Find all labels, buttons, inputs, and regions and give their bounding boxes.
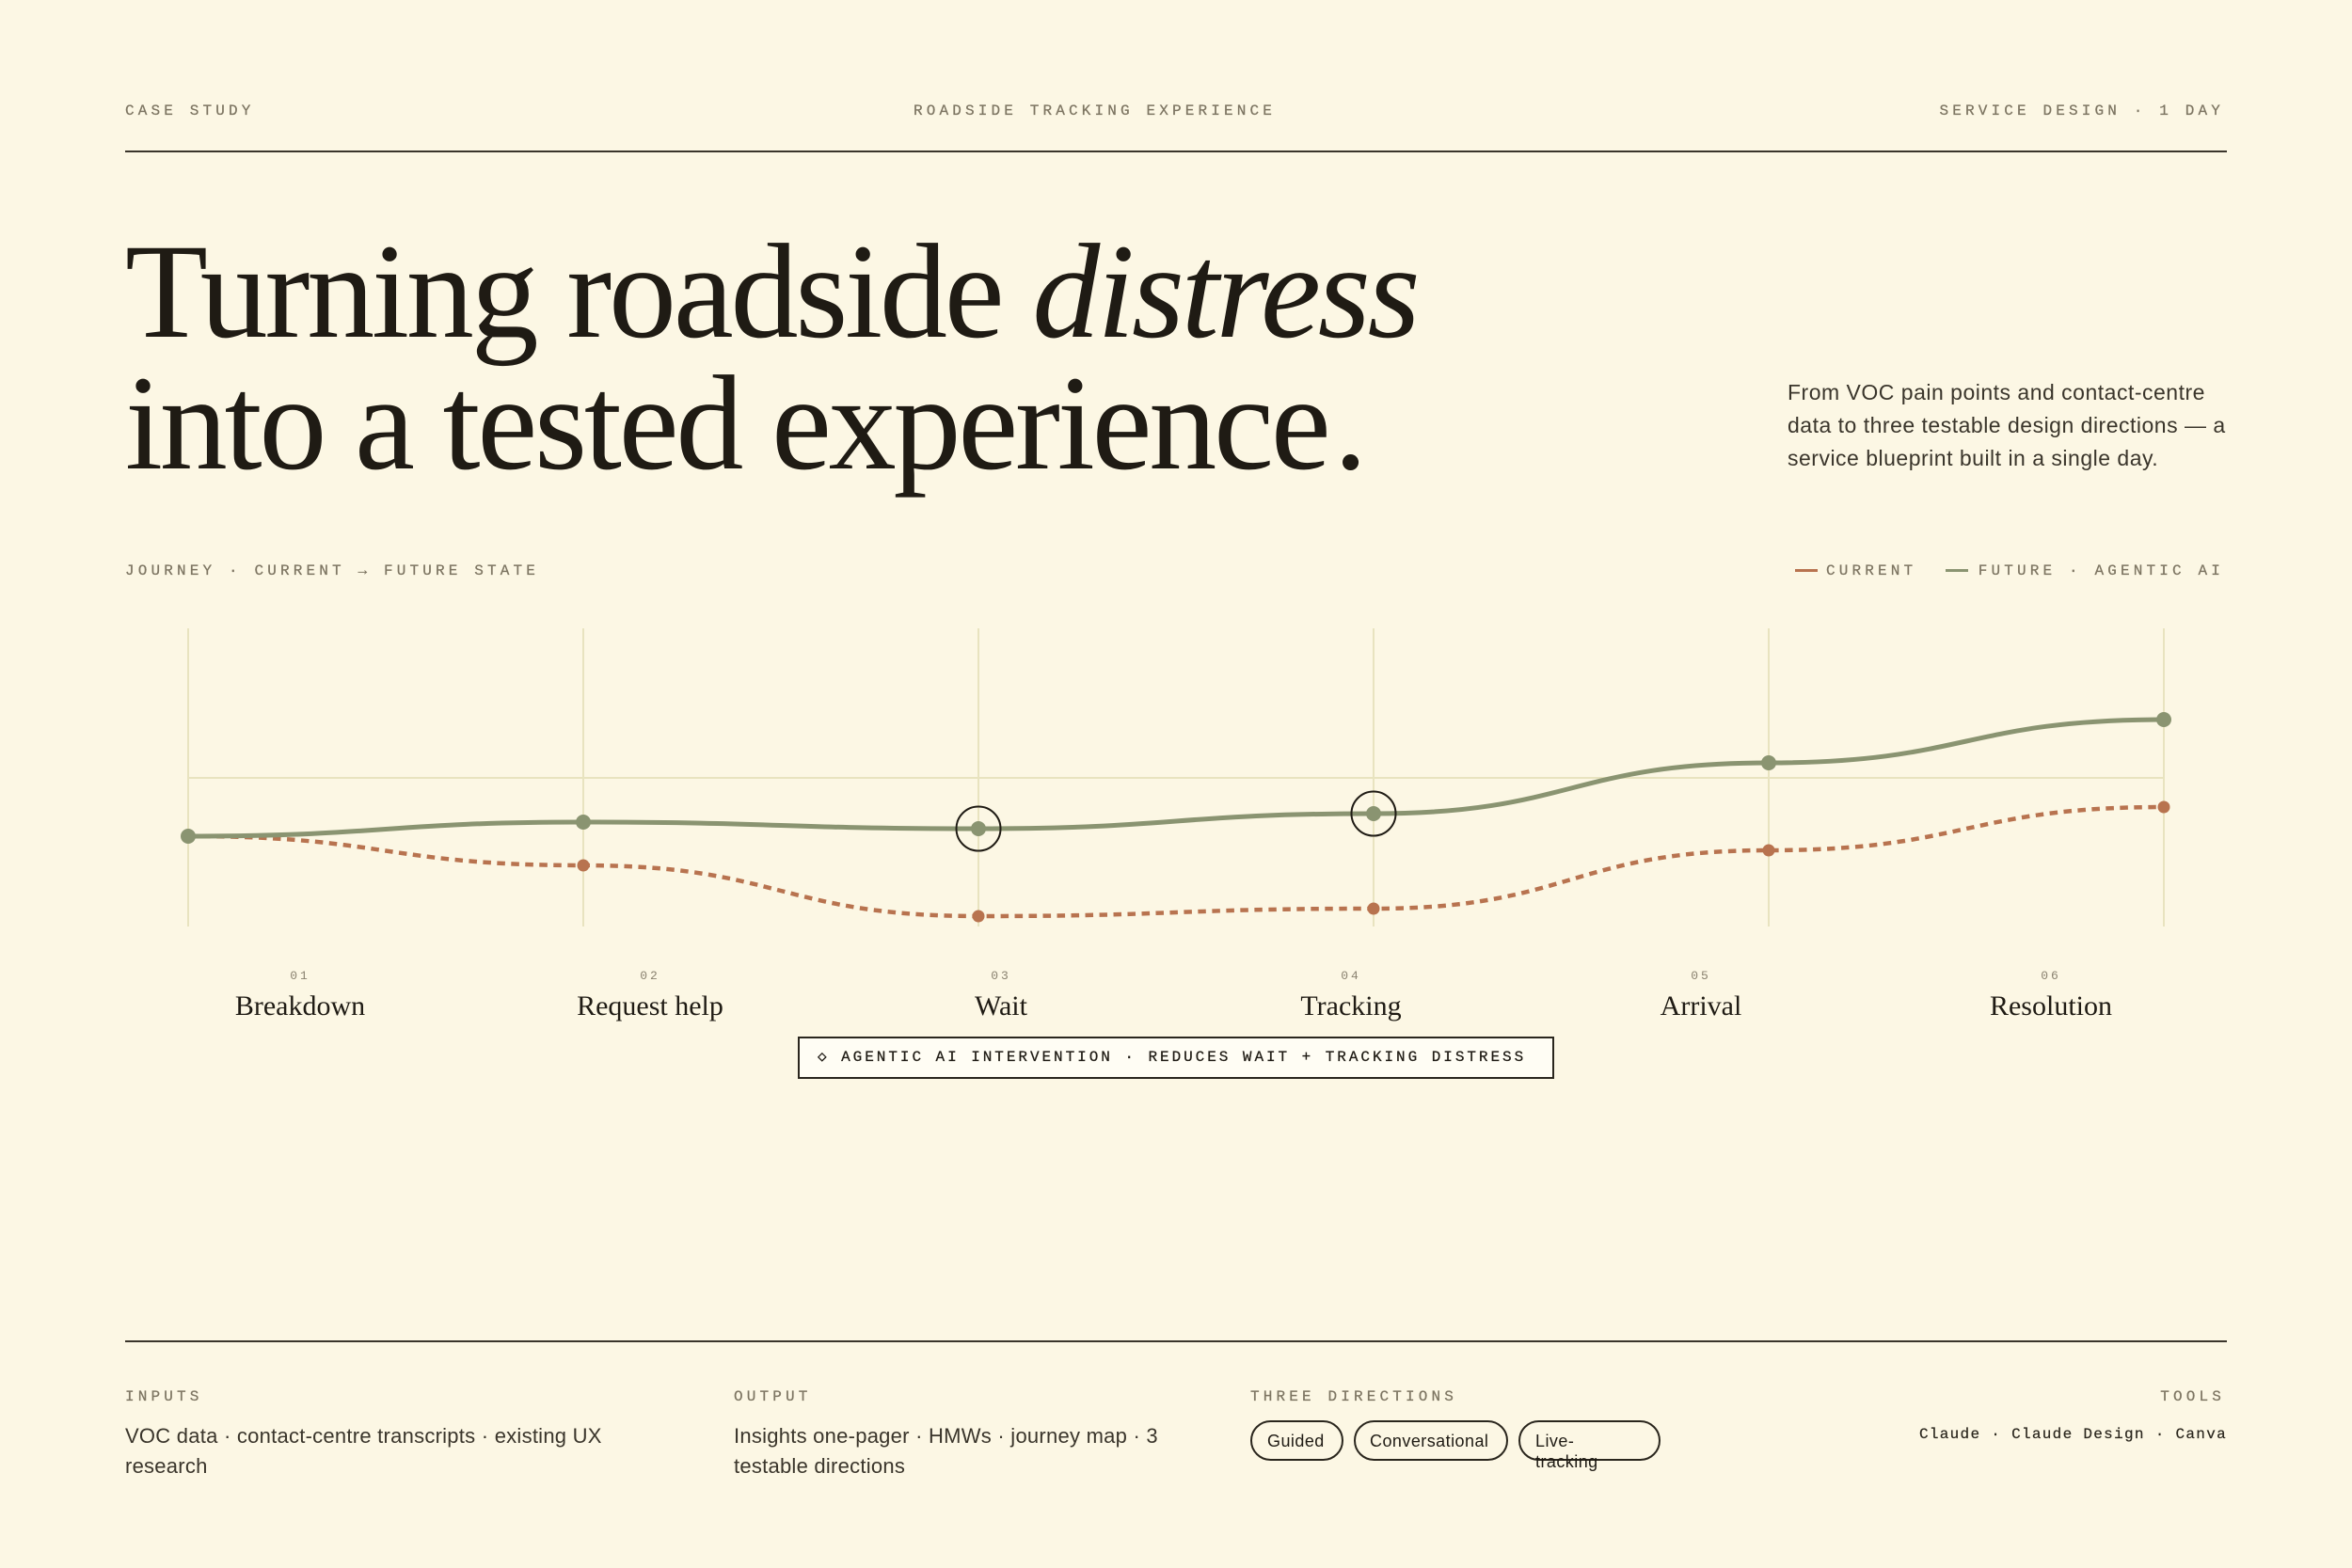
tools list: Claude · Claude Design · Canva (1919, 1426, 2227, 1443)
pill: guided (1250, 1420, 1343, 1461)
stage name: tracking: Tracking (1300, 990, 1402, 1022)
current state dashed line (188, 801, 2169, 922)
header bar (125, 103, 2224, 119)
pill: live-tracking (1518, 1420, 1661, 1461)
main heading: into a tested experience. (125, 349, 1364, 499)
intro paragraph (1788, 380, 2226, 470)
callout: agentic AI intervention: ◇ AGENTIC AI INTERVENTION · REDUCES WAIT + TRACKING DISTRESS (818, 1049, 1526, 1066)
journey line chart (181, 628, 2171, 927)
tools label: TOOLS (2160, 1388, 2225, 1405)
inputs text: research (125, 1454, 208, 1478)
pill: live-tracking: Live- (1535, 1432, 1574, 1450)
stage number 02: 02 (640, 969, 660, 983)
stage number 01: 01 (290, 969, 310, 983)
stage name: request help: Request help (577, 990, 723, 1022)
stage labels (235, 969, 2112, 1022)
callout: agentic AI intervention (798, 1037, 1554, 1079)
output text: Insights one-pager · HMWs · journey map · 3 (734, 1424, 1158, 1448)
stage name: wait: Wait (975, 990, 1027, 1022)
footer: tools (1919, 1388, 2227, 1443)
legend label: future: FUTURE · AGENTIC AI (1979, 562, 2224, 579)
main heading (125, 217, 1417, 499)
future state solid line (181, 712, 2171, 844)
inputs text (125, 1424, 602, 1478)
stage name: arrival: Arrival (1661, 990, 1741, 1022)
chart legend (1795, 562, 2224, 579)
text: tracking (1535, 1452, 1598, 1471)
footer: inputs (125, 1388, 602, 1478)
stage number 06: 06 (2041, 969, 2061, 983)
pill: conversational (1354, 1420, 1508, 1461)
header label: project title: ROADSIDE TRACKING EXPERIENCE (914, 103, 1276, 119)
inputs text: VOC data · contact-centre transcripts · existing UX (125, 1424, 602, 1448)
intro paragraph: From VOC pain points and contact-centre (1788, 380, 2205, 404)
output text (734, 1424, 1158, 1478)
intro paragraph: service blueprint built in a single day. (1788, 446, 2158, 470)
output text: testable directions (734, 1454, 905, 1478)
intervention marker: tracking (1351, 792, 1396, 835)
three directions label: THREE DIRECTIONS (1250, 1388, 1457, 1405)
stage number 05: 05 (1691, 969, 1711, 983)
chart section heading: JOURNEY · CURRENT → FUTURE STATE (125, 562, 539, 579)
header label: discipline and duration: SERVICE DESIGN · 1 DAY (1939, 103, 2224, 119)
header label: case study: CASE STUDY (125, 103, 255, 119)
intervention marker: wait (956, 807, 1001, 850)
intro paragraph: data to three testable design directions — a (1788, 413, 2226, 437)
footer: output (734, 1388, 1158, 1478)
pill: conversational: Conversational (1370, 1432, 1488, 1450)
stage number 03: 03 (991, 969, 1011, 983)
stage name: resolution: Resolution (1990, 990, 2112, 1022)
legend swatch: future (1946, 569, 1968, 572)
main heading: Turning roadside distress (125, 217, 1417, 367)
stage number 04: 04 (1341, 969, 1361, 983)
inputs label: INPUTS (125, 1388, 203, 1405)
pill: guided: Guided (1267, 1432, 1325, 1450)
legend label: current: CURRENT (1826, 562, 1916, 579)
output label: OUTPUT (734, 1388, 812, 1405)
legend swatch: current (1795, 569, 1818, 572)
stage name: breakdown: Breakdown (235, 990, 365, 1022)
